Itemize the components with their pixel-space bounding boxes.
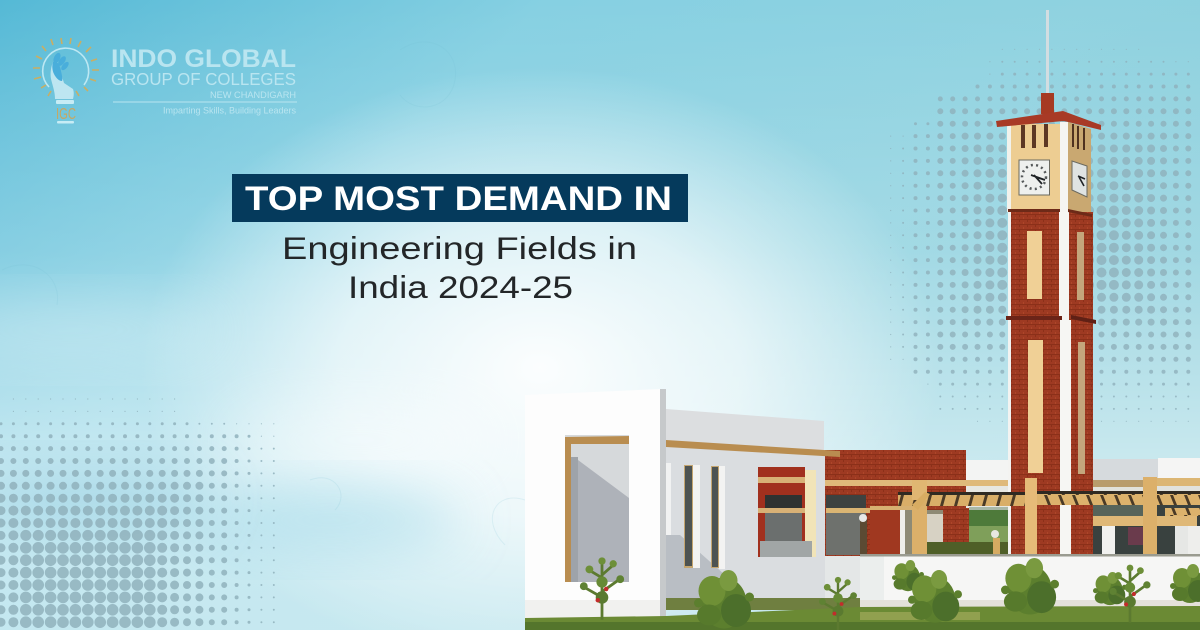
right post [1143,477,1157,555]
logo wordmark: GROUP OF COLLEGES [111,69,296,89]
side clock [1072,161,1087,197]
icon: light bulb with hand: IGC [56,106,76,123]
icon: light bulb with hand [33,38,99,124]
logo wordmark [111,45,297,116]
left grey wing [666,409,860,601]
clock tower [996,10,1101,556]
brick block [825,450,1011,556]
subtitle: India 2024-25 [348,269,573,305]
pergola [898,477,1200,556]
logo wordmark: INDO GLOBAL [111,45,296,73]
shrubs [580,557,1200,630]
white front frame [525,389,666,620]
window [758,467,816,557]
lawn [525,598,1200,630]
halftone dots: bottom left [1,399,274,622]
brick shaft [1006,209,1096,556]
subtitle: Engineering Fields in [282,230,637,266]
title banner: TOP MOST DEMAND IN [245,180,672,218]
campus building [525,10,1200,630]
front clock [1019,160,1050,195]
rear right wings [966,458,1200,556]
antenna [1046,10,1049,93]
logo: Indo Global Group of Colleges [33,38,297,124]
boundary wall [860,554,1200,607]
upper clock section [1007,122,1091,215]
green opening [927,507,1010,556]
roof [996,111,1101,130]
chimney cap [1041,93,1054,114]
logo wordmark: Imparting Skills, Building Leaders [163,106,296,116]
beige post [912,480,927,556]
halftone dots: top right [891,49,1189,421]
subtitle [282,230,637,305]
title banner [232,174,688,222]
logo wordmark: NEW CHANDIGARH [210,90,296,101]
